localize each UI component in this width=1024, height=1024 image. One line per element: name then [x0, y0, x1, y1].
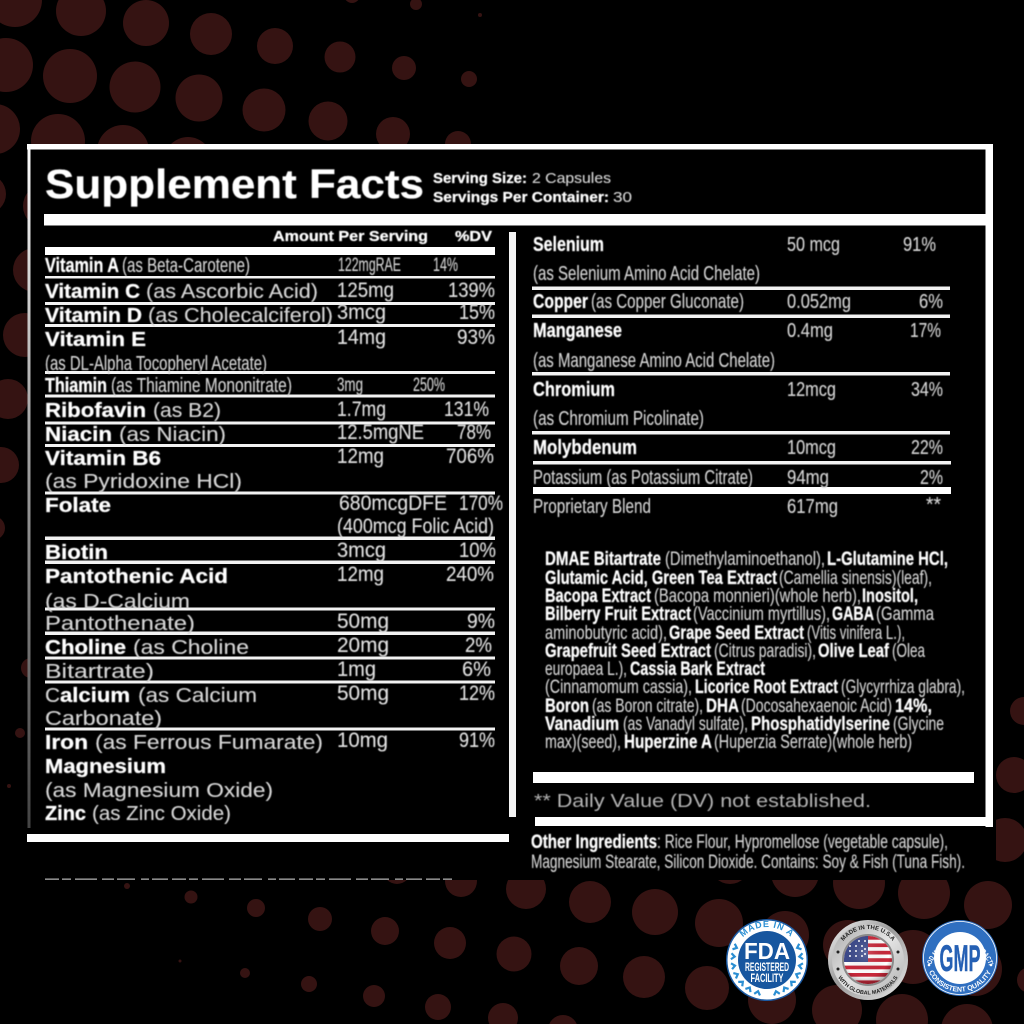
- row: pantothenic acid: 240%: [446, 563, 494, 586]
- row: manganese: (as Manganese Amino Acid Chelate): [533, 350, 775, 372]
- row: selenium: Selenium: [533, 234, 604, 256]
- row: riboflavin: 1.7mg: [337, 398, 386, 421]
- proprietary blend ingredient list: (Vitis vinifera L.),: [807, 623, 905, 644]
- row: niacin: 12.5mgNE: [337, 421, 424, 444]
- proprietary blend ingredient list: aminobutyric acid),: [545, 623, 667, 644]
- row: vitamin D: 3mcg: [337, 301, 386, 324]
- row: pantothenate: 9%: [467, 610, 495, 633]
- row: molybdenum: 10mcg: [787, 437, 836, 459]
- row: calcium: 12%: [459, 682, 495, 705]
- row: choline: 2%: [465, 634, 492, 657]
- row: riboflavin: (as B2): [153, 400, 221, 422]
- proprietary blend ingredient list: Licorice Root Extract: [695, 677, 838, 698]
- row: thiamin: (as Thiamine Mononitrate): [111, 375, 292, 397]
- row: chromium: 12mcg: [787, 379, 836, 401]
- row: selenium: (as Selenium Amino Acid Chelate): [533, 263, 760, 285]
- row: vitamin C: 125mg: [337, 279, 394, 302]
- proprietary blend ingredient list: europaea L.),: [545, 659, 627, 680]
- row: vitamin B6: 12mg: [337, 445, 384, 468]
- row: iron: 91%: [459, 729, 495, 752]
- row: thiamin: [45, 375, 445, 397]
- row: vitamin A: (as Beta-Carotene): [122, 255, 250, 277]
- row: choline: [45, 634, 492, 659]
- row: vitamin C: [45, 279, 495, 303]
- badge: good manufacturing practice: CONSISTENT QUALITY: [930, 970, 990, 992]
- proprietary blend ingredient list: (Camellia sinensis)(leaf),: [779, 568, 932, 589]
- serving information: Serving Size:: [433, 171, 527, 187]
- row: copper: 6%: [919, 291, 943, 313]
- proprietary blend ingredient list: Bilberry Fruit Extract: [545, 604, 692, 625]
- proprietary blend ingredient list: (Citrus paradisi),: [714, 641, 816, 662]
- proprietary blend ingredient list: (as Boron citrate),: [592, 696, 703, 717]
- row: iron: Iron: [45, 732, 88, 754]
- badge: FDA registered facility: FACILITY: [750, 971, 784, 985]
- row: selenium: 91%: [903, 234, 936, 256]
- row: vitamin E: 14mg: [337, 326, 386, 349]
- panel: supplement facts label: [27, 144, 996, 880]
- row: bitartrate: [45, 658, 491, 683]
- row: potassium: Potassium (as Potassium Citrate): [533, 467, 753, 489]
- row: vitamin A: 122mgRAE: [338, 255, 401, 276]
- proprietary blend ingredient list: Boron: [545, 696, 589, 717]
- row: riboflavin: Ribofavin: [45, 400, 146, 422]
- row: niacin: Niacin: [45, 424, 112, 446]
- row: pantothenic acid: Pantothenic Acid: [45, 566, 228, 588]
- row: copper: (as Copper Gluconate): [591, 291, 744, 313]
- proprietary blend ingredient list: Grapefruit Seed Extract: [545, 641, 712, 662]
- proprietary blend ingredient list: (Huperzia Serrate)(whole herb): [714, 732, 912, 753]
- row: biotin: [45, 539, 496, 564]
- proprietary blend ingredient list: Grape Seed Extract: [669, 623, 805, 644]
- serving information: 2 Capsules: [532, 171, 611, 187]
- row: calcium: [45, 682, 495, 730]
- proprietary blend ingredient list: (Dimethylaminoethanol),: [665, 549, 825, 570]
- row: folate: 170%: [459, 492, 503, 515]
- row: vitamin C: 139%: [448, 279, 495, 302]
- row: vitamin E: [45, 326, 495, 375]
- row: vitamin D: 15%: [459, 301, 495, 324]
- row: thiamin: 250%: [413, 375, 445, 396]
- row: vitamin B6: Vitamin B6: [45, 448, 161, 470]
- proprietary blend ingredient list: Inositol,: [862, 586, 918, 607]
- row: proprietary blend: 617mg: [787, 496, 838, 518]
- row: calcium: alcium: [60, 685, 130, 707]
- column headings: [273, 229, 492, 245]
- row: calcium: 50mg: [337, 682, 389, 705]
- badge: FDA registered facility: FDA: [744, 938, 790, 964]
- column headings: Amount Per Serving: [273, 229, 428, 245]
- row: folate: (400mcg Folic Acid): [337, 515, 494, 538]
- proprietary blend ingredient list: (Cinnamomum cassia),: [545, 677, 692, 698]
- proprietary blend ingredient list: (Glycyrrhiza glabra),: [841, 677, 965, 698]
- row: calcium: C: [45, 685, 60, 707]
- row: selenium: 50 mcg: [787, 234, 840, 256]
- row: manganese: 17%: [910, 320, 941, 342]
- row: chromium: [533, 379, 943, 430]
- row: molybdenum: [533, 437, 943, 459]
- proprietary blend ingredient list: (Gamma: [876, 604, 934, 625]
- row: zinc: Zinc: [45, 803, 86, 825]
- row: proprietary blend: [533, 494, 941, 518]
- row: bitartrate: Bitartrate): [45, 661, 154, 683]
- left nutrient table: [45, 255, 503, 825]
- proprietary blend ingredient list: (Bacopa monnieri)(whole herb),: [654, 586, 861, 607]
- badge: good manufacturing practice: GOOD MANUFACTURING PRACTICE: [927, 948, 994, 966]
- proprietary blend ingredient list: (Glycine: [893, 714, 944, 735]
- proprietary blend ingredient list: DHA: [706, 696, 739, 717]
- row: vitamin E: (as DL-Alpha Tocopheryl Acetate): [45, 353, 267, 375]
- proprietary blend ingredient list: (Olea: [892, 641, 925, 662]
- row: potassium: 2%: [920, 467, 943, 489]
- row: thiamin: 3mg: [337, 375, 363, 396]
- proprietary blend ingredient list: (as Vanadyl sulfate),: [623, 714, 748, 735]
- proprietary blend ingredient list: (Docosahexaenoic Acid): [741, 696, 892, 717]
- badge: made in the USA: WITH GLOBAL MATERIALS: [838, 975, 898, 994]
- row: vitamin B6: [45, 445, 494, 493]
- row: vitamin A: Vitamin A: [45, 255, 119, 277]
- row: bitartrate: 1mg: [337, 658, 376, 681]
- row: vitamin B6: (as Pyridoxine HCl): [45, 471, 242, 493]
- row: pantothenate: 50mg: [337, 610, 389, 633]
- row: vitamin D: (as Cholecalciferol): [148, 305, 333, 327]
- row: manganese: [533, 320, 941, 372]
- row: manganese: Manganese: [533, 320, 622, 342]
- row: molybdenum: 22%: [911, 437, 943, 459]
- row: chromium: Chromium: [533, 379, 615, 401]
- title: Supplement Facts: [45, 161, 424, 207]
- row: manganese: 0.4mg: [787, 320, 833, 342]
- row: pantothenic acid: (as D-Calcium: [45, 591, 190, 613]
- row: vitamin B6: 706%: [446, 445, 494, 468]
- proprietary blend ingredient list: Bacopa Extract: [545, 586, 652, 607]
- serving information: 30: [613, 190, 632, 206]
- proprietary blend ingredient list: [545, 549, 965, 753]
- row: pantothenic acid: [45, 563, 494, 613]
- row: biotin: 10%: [459, 539, 496, 562]
- row: copper: 0.052mg: [787, 291, 851, 313]
- proprietary blend ingredient list: Vanadium: [545, 714, 619, 735]
- badge: made in the USA: MADE IN THE U.S.A: [840, 924, 895, 941]
- row: copper: [533, 291, 943, 313]
- row: choline: (as Choline: [133, 637, 249, 659]
- row: riboflavin: [45, 398, 489, 422]
- row: niacin: [45, 421, 491, 446]
- row: biotin: 3mcg: [337, 539, 386, 562]
- badge: good manufacturing practice: GMP: [940, 938, 980, 979]
- row: vitamin C: (as Ascorbic Acid): [146, 281, 318, 303]
- proprietary blend ingredient list: GABA: [832, 604, 874, 625]
- row: folate: 680mcgDFE: [339, 492, 447, 515]
- row: potassium: 94mg: [787, 467, 829, 489]
- column headings: %DV: [455, 229, 492, 245]
- row: thiamin: Thiamin: [45, 375, 107, 397]
- row: bitartrate: 6%: [462, 658, 491, 681]
- row: folate: [45, 492, 503, 538]
- badge: FDA registered facility: MADE IN A: [739, 920, 793, 937]
- badge: FDA registered facility: REGISTERED: [745, 960, 789, 974]
- proprietary blend ingredient list: (Vaccinium myrtillus),: [693, 604, 830, 625]
- row: pantothenate: Pantothenate): [45, 613, 195, 635]
- serving information: [433, 171, 632, 206]
- row: proprietary blend: **: [926, 494, 941, 516]
- badge: made in the USA: [828, 920, 908, 1000]
- row: vitamin A: 14%: [433, 255, 458, 276]
- row: pantothenate: [45, 610, 495, 635]
- proprietary blend ingredient list: Huperzine A: [624, 732, 712, 753]
- row: choline: 20mg: [337, 634, 389, 657]
- badge: FDA registered facility: [726, 919, 808, 1001]
- row: vitamin A: [45, 255, 458, 277]
- proprietary blend ingredient list: L-Glutamine HCl,: [827, 549, 948, 570]
- row: selenium: [533, 234, 936, 285]
- row: zinc: (as Zinc Oxide): [92, 803, 231, 825]
- row: niacin: 78%: [457, 421, 491, 444]
- proprietary blend ingredient list: Phosphatidylserine: [751, 714, 890, 735]
- row: vitamin E: Vitamin E: [45, 329, 146, 351]
- badge: good manufacturing practice: [922, 920, 998, 996]
- right nutrient table: [533, 234, 943, 518]
- row: calcium: Carbonate): [45, 708, 162, 730]
- row: vitamin E: 93%: [457, 326, 495, 349]
- proprietary blend ingredient list: Glutamic Acid, Green Tea Extract: [545, 568, 778, 589]
- row: magnesium: [45, 756, 273, 802]
- proprietary blend ingredient list: Cassia Bark Extract: [630, 659, 766, 680]
- daily value footnote: ** Daily Value (DV) not established.: [534, 791, 871, 811]
- row: chromium: (as Chromium Picolinate): [533, 408, 704, 430]
- other ingredients: Other Ingredients: [531, 832, 657, 853]
- row: riboflavin: 131%: [444, 398, 489, 421]
- row: copper: Copper: [533, 291, 588, 313]
- row: folate: Folate: [45, 495, 111, 517]
- row: iron: 10mg: [337, 729, 388, 752]
- row: pantothenic acid: 12mg: [337, 563, 384, 586]
- row: magnesium: Magnesium: [45, 756, 166, 778]
- other ingredients: [531, 832, 965, 873]
- row: proprietary blend: Proprietary Blend: [533, 496, 651, 518]
- row: vitamin D: Vitamin D: [45, 305, 142, 327]
- row: vitamin C: Vitamin C: [45, 281, 140, 303]
- row: niacin: (as Niacin): [119, 424, 226, 446]
- serving information: Servings Per Container:: [433, 190, 609, 206]
- row: iron: (as Ferrous Fumarate): [95, 732, 323, 754]
- row: molybdenum: Molybdenum: [533, 437, 637, 459]
- row: calcium: (as Calcium: [138, 685, 257, 707]
- row: iron: [45, 729, 495, 754]
- proprietary blend ingredient list: max)(seed),: [545, 732, 621, 753]
- proprietary blend ingredient list: DMAE Bitartrate: [545, 549, 661, 570]
- row: vitamin D: [45, 301, 495, 327]
- row: biotin: Biotin: [45, 542, 108, 564]
- proprietary blend ingredient list: 14%,: [895, 696, 932, 717]
- row: choline: Choline: [45, 637, 126, 659]
- row: magnesium: (as Magnesium Oxide): [45, 780, 273, 802]
- row: chromium: 34%: [911, 379, 943, 401]
- proprietary blend ingredient list: Olive Leaf: [818, 641, 890, 662]
